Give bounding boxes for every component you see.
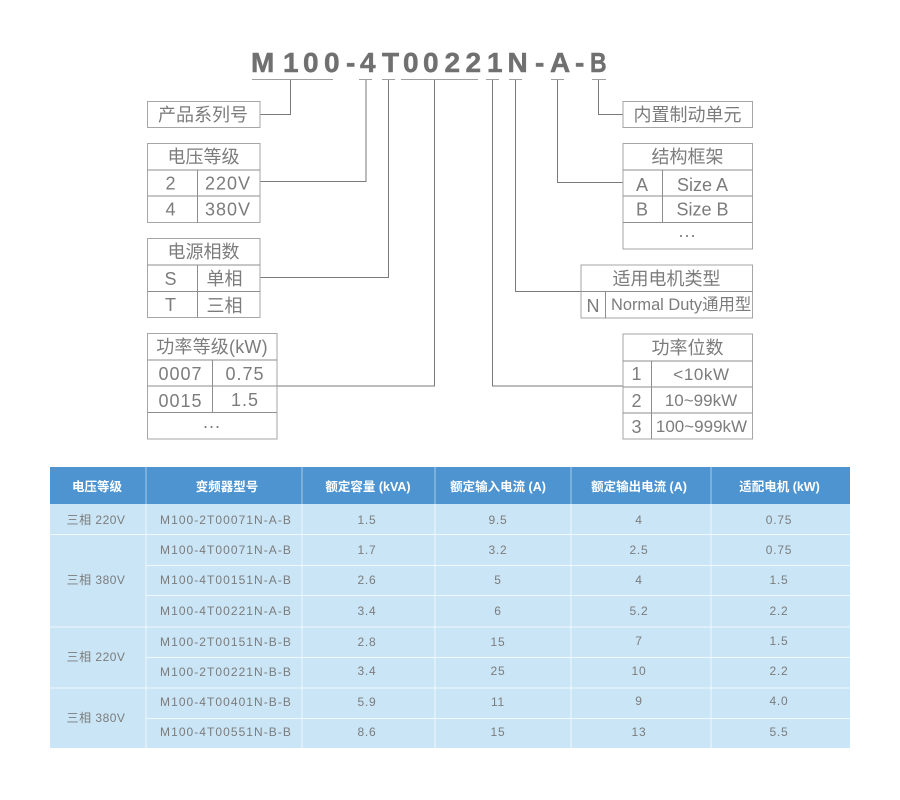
connector: brake unit	[598, 80, 623, 114]
panel: motor type	[581, 265, 752, 318]
panel: power rating: 1.5	[231, 390, 259, 410]
panel: frame size: B	[636, 200, 648, 220]
panel: power phase: T	[165, 295, 177, 315]
panel: product series: 产品系列号	[158, 105, 248, 125]
code underlines	[252, 78, 606, 80]
panel: power phase	[148, 238, 260, 318]
row 2: 1.7	[357, 543, 377, 557]
panel: power rating: ...	[203, 412, 221, 432]
row 2: 2.5	[629, 543, 649, 557]
row 3: M100-4T00151N-A-B	[160, 573, 292, 587]
row 5: 15	[491, 635, 505, 649]
row 7: 5.9	[357, 695, 377, 709]
connector: voltage	[260, 80, 366, 182]
panel: frame size: Size B	[676, 200, 729, 220]
connector: product series	[260, 80, 290, 114]
row 3	[160, 573, 789, 587]
panel: power digits: 3	[631, 417, 643, 437]
row 3: 1.5	[769, 573, 789, 587]
row 4: 2.2	[769, 604, 789, 618]
row 1: M100-2T00071N-A-B	[160, 513, 292, 527]
row 6: 10	[632, 664, 646, 678]
row 7: 11	[491, 695, 505, 709]
panel: power rating: 0007	[158, 364, 203, 384]
row 5	[160, 634, 789, 649]
row 4	[160, 604, 789, 618]
connector: power rating	[277, 80, 434, 386]
row 7: 4.0	[769, 694, 789, 708]
row 2: 3.2	[488, 543, 508, 557]
voltage column: 三相 380V	[67, 711, 125, 725]
voltage column	[67, 513, 125, 725]
panel: power digits: 功率位数	[652, 338, 724, 358]
table header: 电压等级	[72, 479, 122, 494]
voltage column: 三相 220V	[67, 650, 125, 664]
table header: 变频器型号	[196, 479, 258, 494]
panel: power rating: 0015	[158, 391, 203, 411]
connector: frame	[558, 80, 623, 182]
row 4: 5.2	[629, 604, 649, 618]
voltage column: 三相 220V	[67, 513, 125, 527]
row 5: M100-2T00151N-B-B	[160, 635, 292, 649]
row 4: 6	[494, 604, 502, 618]
panel: power digits: <10kW	[673, 365, 730, 384]
table header: 适配电机 (kW)	[739, 479, 820, 494]
panel: power phase: 电源相数	[168, 242, 240, 262]
connector: phase	[260, 80, 388, 278]
row 6	[160, 664, 789, 679]
panel: power phase: S	[164, 269, 178, 289]
row 6: 25	[491, 664, 505, 678]
panel: frame size: ...	[678, 221, 697, 241]
row 4: 3.4	[357, 604, 377, 618]
row 3: 2.6	[357, 573, 377, 587]
row 1: 9.5	[488, 513, 508, 527]
row 5: 1.5	[769, 634, 789, 648]
panel: power phase: 三相	[206, 296, 242, 316]
row 6: 2.2	[769, 664, 789, 678]
row 1: 4	[635, 513, 643, 527]
panel: power rating: 功率等级(kW)	[156, 337, 268, 357]
panel: power digits: 10~99kW	[665, 391, 737, 410]
row 8: 5.5	[769, 725, 789, 739]
table body background	[50, 504, 850, 748]
panel: power phase: 单相	[206, 269, 242, 289]
row 2: M100-4T00071N-A-B	[160, 543, 292, 557]
panel: motor type: 适用电机类型	[612, 269, 720, 289]
panel: power rating	[148, 334, 277, 439]
panel: power digits: 1	[631, 364, 643, 384]
panel: frame size: A	[636, 175, 648, 195]
row 8: 13	[632, 725, 646, 739]
title: model code: M100-4T00221N-A-	[251, 47, 584, 78]
panel: voltage class: 电压等级	[168, 147, 240, 167]
row 5: 7	[635, 634, 643, 648]
row 7	[160, 694, 789, 709]
row 5: 2.8	[357, 635, 377, 649]
panel: motor type: Normal Duty通用型	[611, 296, 751, 314]
table: specifications	[50, 467, 850, 748]
row 1	[160, 513, 792, 527]
connector: motor type	[516, 80, 581, 292]
panel: motor type: N	[586, 296, 600, 316]
panel: voltage class: 2	[165, 174, 177, 194]
row 2	[160, 543, 792, 557]
table header	[50, 467, 850, 504]
panel: power digits	[623, 334, 752, 439]
row 2: 0.75	[766, 543, 792, 557]
row 6: M100-2T00221N-B-B	[160, 665, 292, 679]
panel: brake unit	[623, 102, 752, 128]
panel: product series	[148, 102, 260, 128]
row 8	[160, 725, 789, 739]
row 1: 0.75	[766, 513, 792, 527]
table header: 额定输入电流 (A)	[450, 479, 546, 494]
table header: 额定输出电流 (A)	[591, 479, 687, 494]
row 6: 3.4	[357, 664, 377, 678]
panel: voltage class: 220V	[205, 174, 251, 194]
panel: power digits: 100~999kW	[656, 417, 747, 436]
panel: frame size: 结构框架	[652, 147, 724, 167]
row 8: 15	[491, 725, 505, 739]
table header: 额定容量 (kVA)	[325, 479, 411, 494]
row 4: M100-4T00221N-A-B	[160, 604, 292, 618]
row 8: 8.6	[357, 725, 377, 739]
row 7: 9	[635, 694, 643, 708]
panel: voltage class: 4	[165, 200, 177, 220]
panel: voltage class: 380V	[205, 200, 251, 220]
row 8: M100-4T00551N-B-B	[160, 725, 292, 739]
panel: frame size: Size A	[677, 175, 728, 195]
panel: frame size	[623, 144, 752, 249]
row 3: 5	[494, 573, 502, 587]
connector: power digits	[492, 80, 623, 386]
title: model code: B	[590, 48, 607, 79]
panel: power digits: 2	[631, 391, 643, 411]
panel: voltage class	[148, 144, 260, 222]
row 1: 1.5	[357, 513, 377, 527]
row 7: M100-4T00401N-B-B	[160, 695, 292, 709]
panel: brake unit: 内置制动单元	[634, 105, 742, 125]
row 3: 4	[635, 573, 643, 587]
voltage column: 三相 380V	[67, 573, 125, 587]
panel: power rating: 0.75	[225, 364, 265, 384]
